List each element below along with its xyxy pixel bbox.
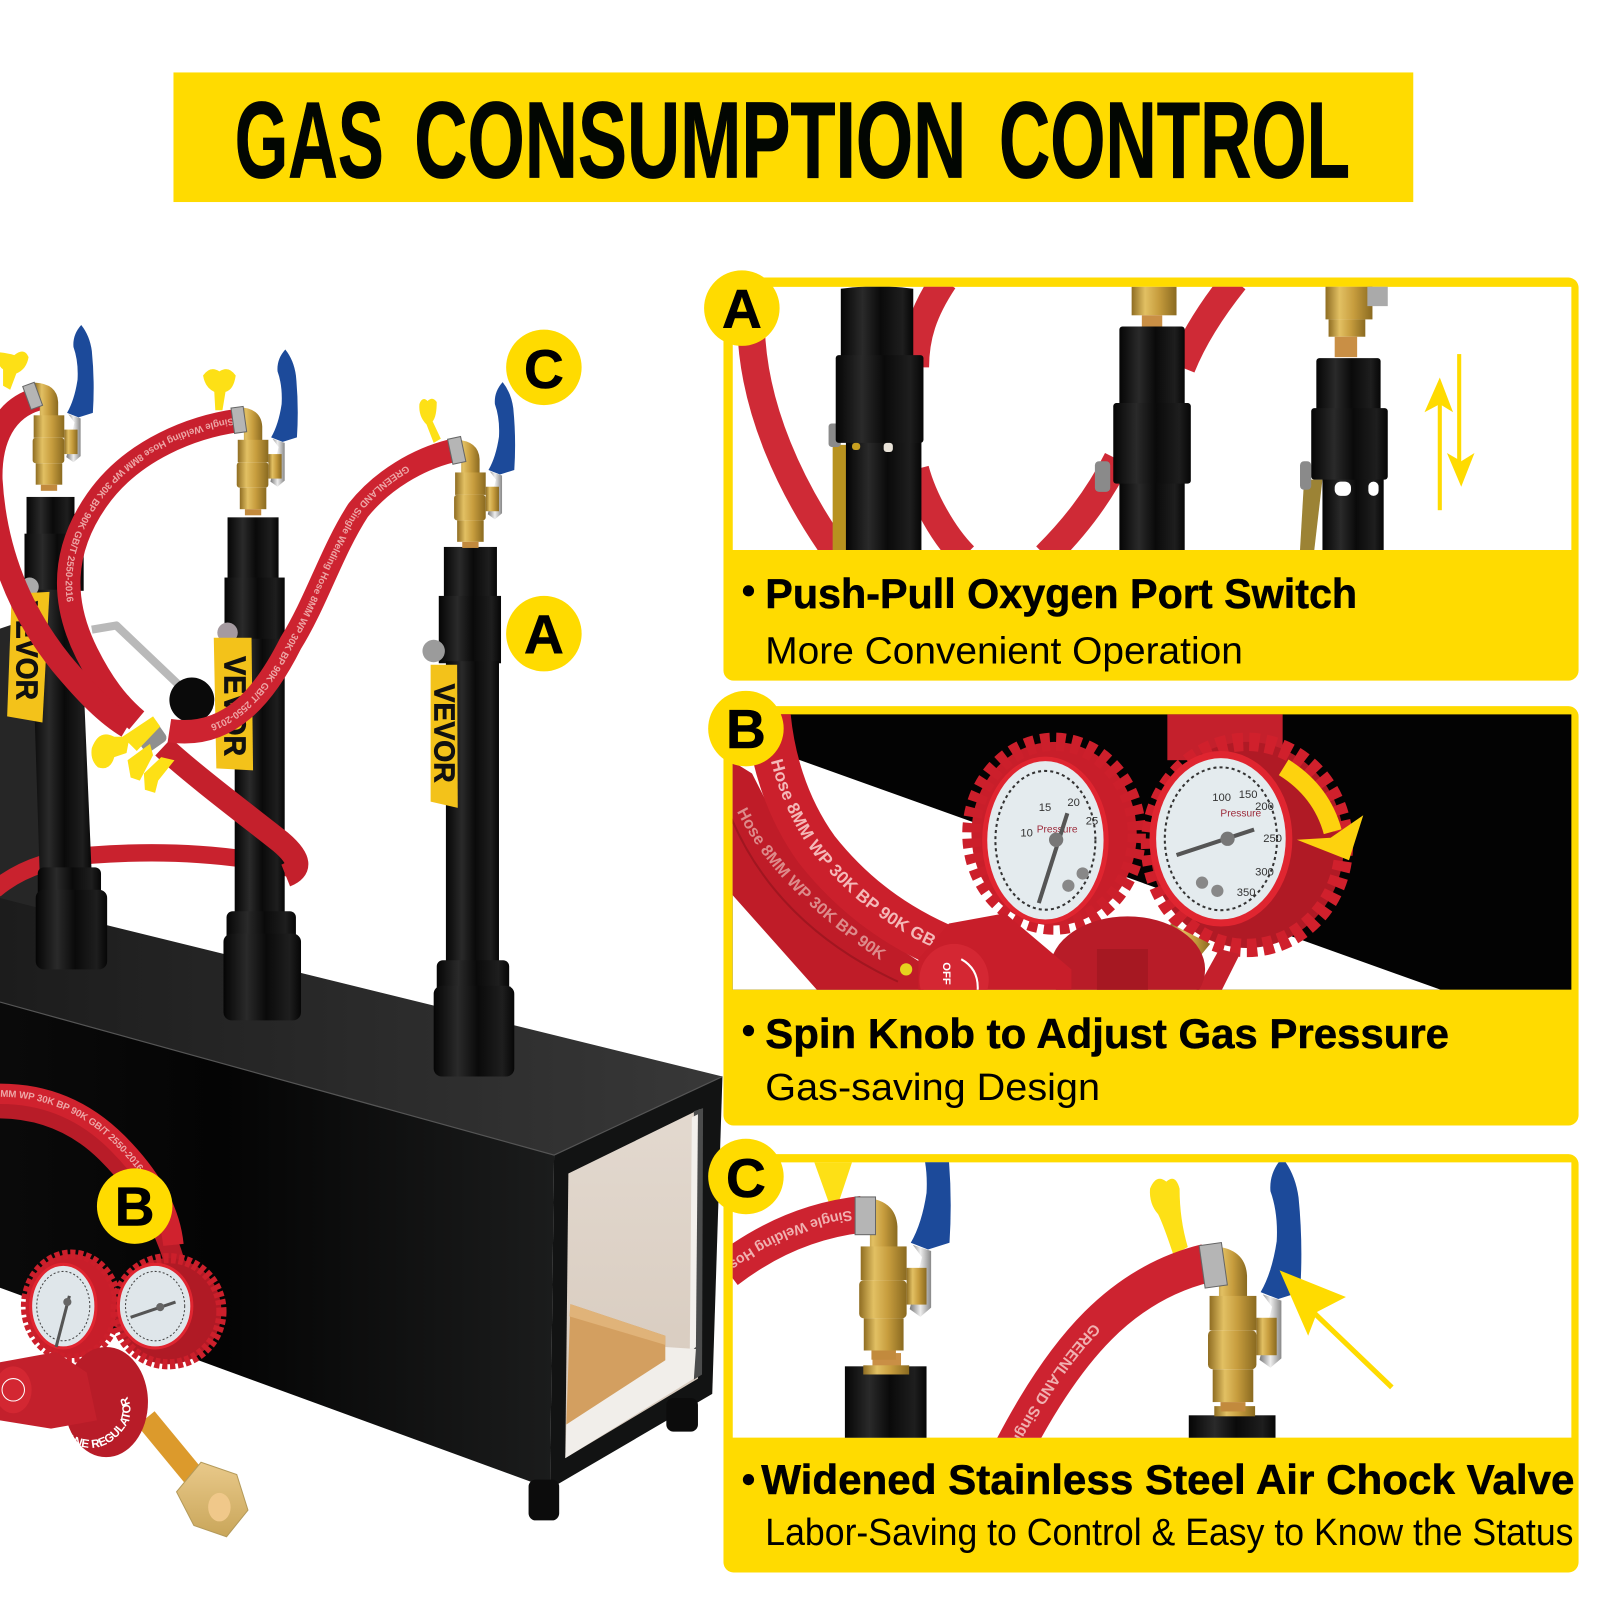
pressure regulator with gauges (0, 1084, 248, 1538)
right gauge (115, 1258, 221, 1364)
badge A: A (722, 278, 762, 340)
regulator hose (0, 1084, 185, 1261)
title banner (173, 72, 1413, 202)
arrow up (1424, 378, 1453, 510)
badge C (708, 1139, 784, 1214)
valve left (33, 325, 94, 491)
middle burner pole (223, 517, 301, 1020)
panel A photo (733, 281, 1571, 556)
panel C text: Labor-Saving to Control & Easy to Know the Status (765, 1511, 1573, 1553)
valve right (454, 382, 515, 548)
right pressure gauge: Pressure (1220, 808, 1262, 819)
badge C (506, 330, 582, 405)
VEVOR tag middle: VEVOR (217, 656, 251, 756)
badge B: B (726, 698, 766, 760)
left pressure gauge (971, 742, 1137, 926)
left pressure gauge: 20 (1067, 797, 1080, 809)
regulator body: OFF (940, 962, 952, 985)
VEVOR tag middle (214, 622, 253, 770)
right pressure gauge: 100 (1212, 792, 1231, 804)
left gauge (26, 1254, 117, 1358)
panel C frame (723, 1154, 1579, 1572)
left pressure gauge: 15 (1039, 802, 1051, 814)
title banner: CONTROL (999, 80, 1350, 201)
right pressure gauge: 200 (1255, 801, 1274, 813)
VEVOR tag right: VEVOR (428, 684, 460, 783)
hose clamps (23, 382, 466, 464)
badge A (704, 270, 780, 346)
panel B text: Spin Knob to Adjust Gas Pressure (765, 1010, 1449, 1057)
rear hose loop (0, 853, 292, 890)
panel C: stainless steel air chock valve (708, 1138, 1579, 1572)
left valve close-up (732, 1162, 951, 1438)
hoses (732, 714, 948, 990)
pole 3 (1300, 286, 1388, 551)
badge B (97, 1168, 172, 1244)
badge A: A (524, 603, 564, 665)
valve middle (237, 349, 298, 515)
panel C photo (732, 1162, 1572, 1438)
regulator knob and dial: PANE REGULATOR (72, 1396, 131, 1448)
title banner: CONSUMPTION (414, 80, 966, 201)
hoses: Hose 8MM WP 30K BP 90K GB/ (771, 758, 935, 946)
panel A text: More Convenient Operation (765, 629, 1243, 671)
forge opening with insulation and brick (565, 1108, 703, 1458)
right valve close-up (997, 1162, 1302, 1438)
yellow wing nuts (91, 716, 174, 793)
red gas hoses: GREENLAND Single Welding Hose 8MM WP 30K BP 90K GB/T 2550-2016 (211, 466, 409, 730)
pointing arrow (1280, 1270, 1392, 1387)
title banner: GAS (235, 80, 384, 201)
panel B photo (732, 714, 1572, 990)
left burner pole (24, 497, 107, 969)
panel B: spin knob to adjust gas pressure (708, 690, 1579, 1126)
right pressure gauge: 350 (1237, 887, 1255, 899)
panel C text (743, 1456, 1574, 1553)
rotation arrow (1284, 767, 1363, 860)
yellow valve keys (0, 351, 441, 443)
VEVOR tag left (7, 578, 49, 722)
panel B text: Gas-saving Design (765, 1066, 1100, 1108)
panel A frame (723, 278, 1579, 681)
pole 2 (1095, 287, 1191, 551)
product photo: gas forge with burners (0, 325, 723, 1538)
panel B text (743, 1010, 1449, 1108)
red gas hoses: Single Welding Hose 8MM WP 30K BP 90K GB/T 2550-2016 (66, 418, 233, 602)
hoses: Hose 8MM WP 30K BP 90K (737, 807, 886, 960)
panel A text (743, 570, 1357, 671)
regulator knob and dial (0, 1347, 148, 1458)
regulator body (900, 914, 1240, 990)
left pressure gauge: Pressure (1037, 825, 1078, 836)
VEVOR tag right (422, 640, 460, 808)
right pressure gauge: 300 (1255, 867, 1274, 879)
brass connector tube and nut (146, 1418, 248, 1537)
right valve close-up: GREENLAND Single (1014, 1325, 1099, 1438)
badge A (506, 596, 582, 671)
panel B frame (723, 706, 1579, 1126)
left pressure gauge: 25 (1086, 815, 1098, 827)
panel C text: Widened Stainless Steel Air Chock Valve (761, 1456, 1574, 1503)
right pressure gauge: 250 (1263, 833, 1282, 845)
badge B (708, 691, 784, 766)
forge back wall (0, 624, 43, 918)
red gas hoses (0, 392, 452, 886)
right pressure gauge (1149, 742, 1344, 948)
VEVOR tag left: VEVOR (9, 601, 43, 700)
left pressure gauge: 10 (1020, 828, 1033, 840)
forge body (0, 898, 722, 1520)
right pressure gauge: 150 (1239, 789, 1257, 801)
panel A text: Push-Pull Oxygen Port Switch (765, 570, 1357, 617)
arrow down (1447, 354, 1474, 487)
adjusting rod and ball (92, 626, 214, 722)
panel A: push-pull oxygen port switch (704, 270, 1579, 681)
right burner pole (434, 547, 514, 1077)
badge C: C (524, 338, 564, 400)
badge B: B (115, 1176, 155, 1238)
badge C: C (726, 1147, 766, 1209)
left valve close-up: Single Welding Hose (732, 1211, 852, 1268)
pole 1 (829, 286, 923, 551)
